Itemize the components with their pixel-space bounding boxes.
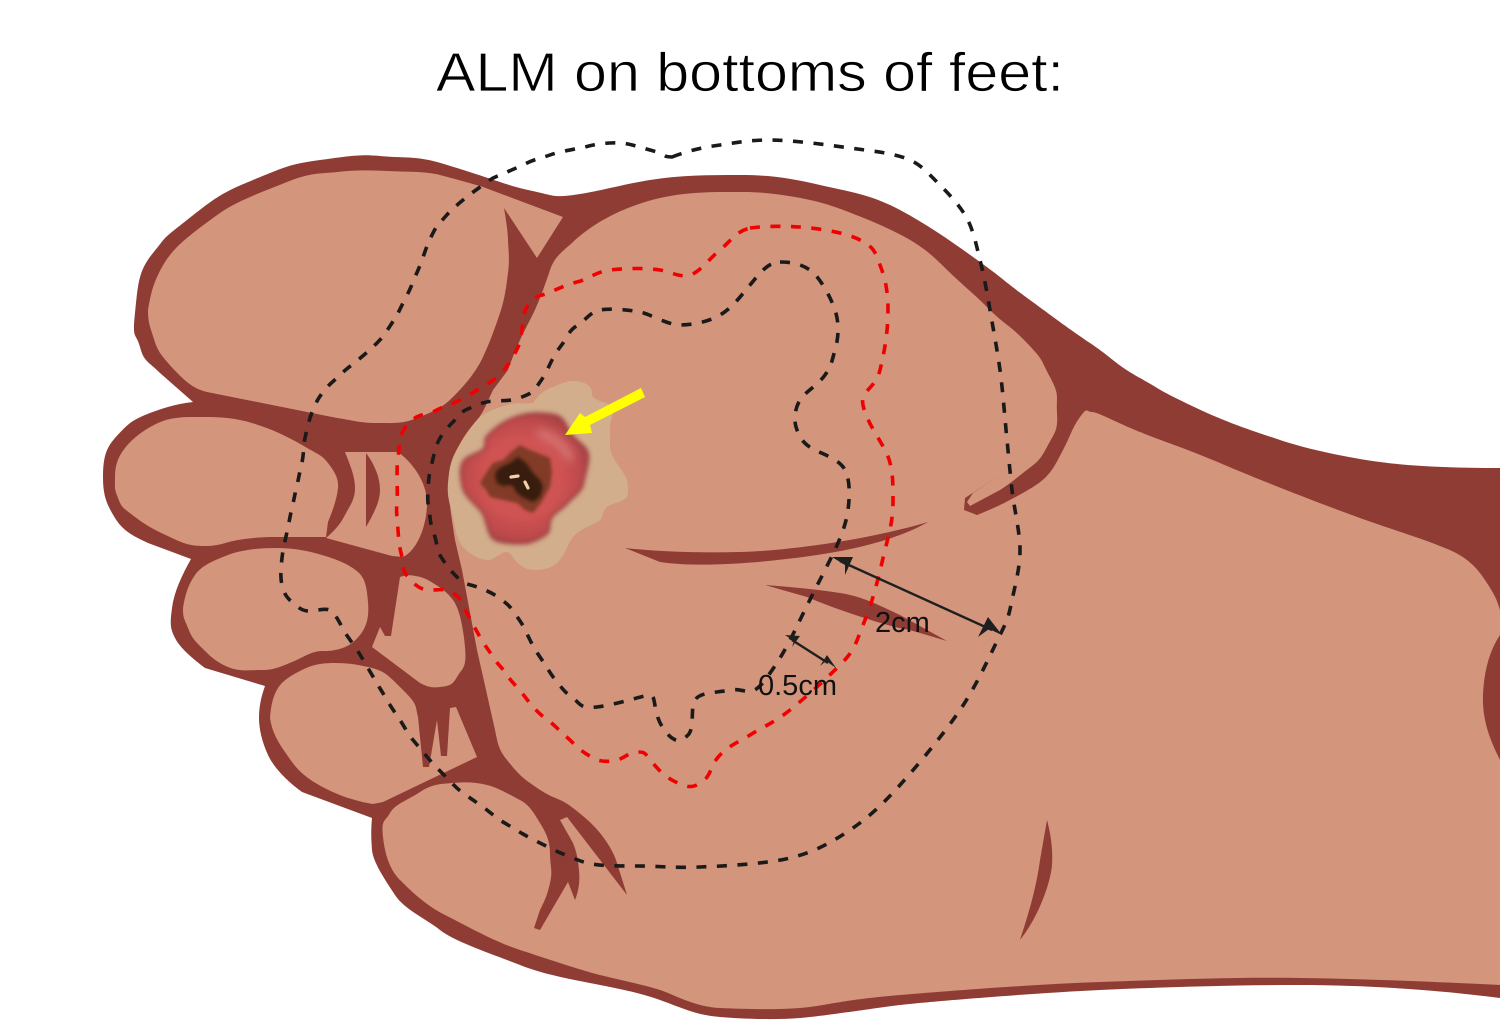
red dashed excision border: [397, 226, 893, 787]
third toe: [183, 548, 368, 670]
big toe: [148, 170, 563, 423]
lesion tan halo: [448, 381, 628, 570]
label: 0.5cm: 0.5cm: [758, 670, 837, 702]
lesion dark core: [495, 457, 543, 502]
lesion red ring: [461, 414, 588, 543]
title: ALM on bottoms of feet:: [436, 41, 1064, 103]
fourth toe: [270, 663, 477, 804]
lesion cream highlights: [511, 476, 528, 488]
web between second toe and sole: [326, 452, 427, 557]
second toe: [115, 417, 338, 546]
foot illustration: [103, 155, 1500, 1019]
yellow arrow pointing to lesion: [565, 388, 645, 435]
inner black dashed lesion border: [428, 262, 849, 741]
toe crease crescent: [366, 453, 380, 527]
2cm measure arrow: [832, 557, 1002, 637]
plantar crease upper: [625, 522, 928, 565]
0.5cm measure arrow: [785, 635, 836, 668]
fourth toe web: [372, 575, 465, 687]
foot silhouette outline: [103, 155, 1500, 1019]
label: 2cm: 2cm: [875, 607, 930, 639]
outer black dashed 2cm margin: [281, 140, 1020, 867]
lesion brown centre: [480, 445, 552, 513]
lesion highlight: [540, 433, 570, 458]
right edge crescent: [1483, 635, 1500, 760]
plantar crease lower: [765, 585, 947, 641]
sole and ball of foot: [382, 192, 1500, 1009]
lesion: [448, 381, 628, 570]
heel crease: [1020, 820, 1052, 940]
